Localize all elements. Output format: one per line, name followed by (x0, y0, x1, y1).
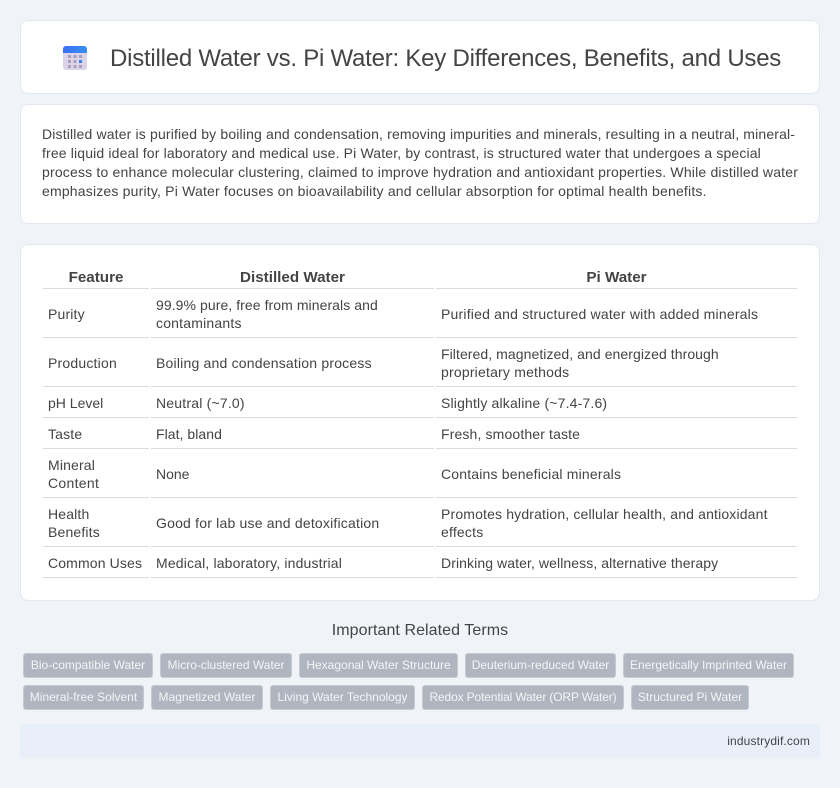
related term tags: Hexagonal Water Structure (306, 658, 451, 672)
comparison table panel (20, 244, 820, 601)
row: purity: contaminants (156, 315, 242, 331)
row: production: Filtered, magnetized, and energized through (441, 346, 719, 362)
row: pH level: Neutral (~7.0) (156, 395, 245, 411)
row: health benefits: Benefits (48, 524, 100, 540)
row: common uses: Drinking water, wellness, alternative therapy (441, 555, 718, 571)
row: production: Boiling and condensation process (156, 355, 372, 371)
related terms heading: Important Related Terms (332, 622, 508, 639)
intro paragraph: Distilled water is purified by boiling and condensation, removing impurities and minerals, resulting in a neutral, mineral- (42, 126, 795, 142)
row: mineral content: Contains beneficial minerals (441, 466, 621, 482)
row: taste: Taste (48, 426, 82, 442)
title: Distilled Water vs. Pi Water: Key Differences, Benefits, and Uses (110, 45, 781, 72)
row: taste (48, 426, 580, 442)
intro paragraph (42, 126, 798, 199)
row: common uses: Medical, laboratory, industrial (156, 555, 342, 571)
related term tags: Micro-clustered Water (168, 658, 284, 672)
footer source text: industrydif.com (727, 734, 810, 748)
row: common uses (48, 555, 718, 571)
row: mineral content: Content (48, 475, 99, 491)
row: pH level: Slightly alkaline (~7.4-7.6) (441, 395, 607, 411)
intro paragraph: free liquid ideal for laboratory and medical use. Pi Water, by contrast, is structured water that undergoes a special (42, 145, 761, 161)
row: mineral content: Mineral (48, 457, 95, 473)
related term tags: Structured Pi Water (638, 690, 742, 704)
footer bar (20, 724, 820, 758)
row: pH level: pH Level (48, 395, 103, 411)
row: taste: Flat, bland (156, 426, 222, 442)
header panel (20, 20, 820, 94)
row: common uses: Common Uses (48, 555, 142, 571)
row: production: proprietary methods (441, 364, 569, 380)
row: purity: Purity (48, 306, 85, 322)
related term tags: Living Water Technology (277, 690, 408, 704)
related term tags: Redox Potential Water (ORP Water) (430, 690, 616, 704)
row: health benefits: Promotes hydration, cellular health, and antioxidant (441, 506, 768, 522)
table header: Pi Water (586, 269, 647, 286)
intro paragraph: process to enhance molecular clustering, claimed to improve hydration and antioxidant properties. While distilled water (42, 164, 798, 180)
related term tags: Energetically Imprinted Water (630, 658, 787, 672)
row: purity (48, 297, 758, 331)
related term tags: Magnetized Water (159, 690, 255, 704)
related term tags (23, 653, 794, 710)
intro paragraph: emphasizes purity, Pi Water focuses on bioavailability and cellular absorption for optimal health benefits. (42, 183, 707, 199)
icon: calendar (63, 46, 87, 70)
table header: Feature (69, 269, 123, 286)
table header: Distilled Water (240, 269, 345, 286)
row: health benefits: effects (441, 524, 483, 540)
comparison table (43, 269, 797, 578)
row: taste: Fresh, smoother taste (441, 426, 580, 442)
related term tags: Mineral-free Solvent (30, 690, 137, 704)
row: purity: Purified and structured water with added minerals (441, 306, 758, 322)
related term tags: Bio-compatible Water (31, 658, 145, 672)
intro text panel (20, 104, 820, 224)
row: production: Production (48, 355, 117, 371)
row: mineral content: None (156, 466, 189, 482)
row: purity: 99.9% pure, free from minerals and (156, 297, 378, 313)
row: health benefits (48, 506, 768, 540)
row: production (48, 346, 719, 380)
row: pH level (48, 395, 607, 411)
related term tags: Deuterium-reduced Water (472, 658, 609, 672)
row: health benefits: Good for lab use and detoxification (156, 515, 379, 531)
row: mineral content (48, 457, 621, 491)
row: health benefits: Health (48, 506, 89, 522)
table header (69, 269, 647, 286)
